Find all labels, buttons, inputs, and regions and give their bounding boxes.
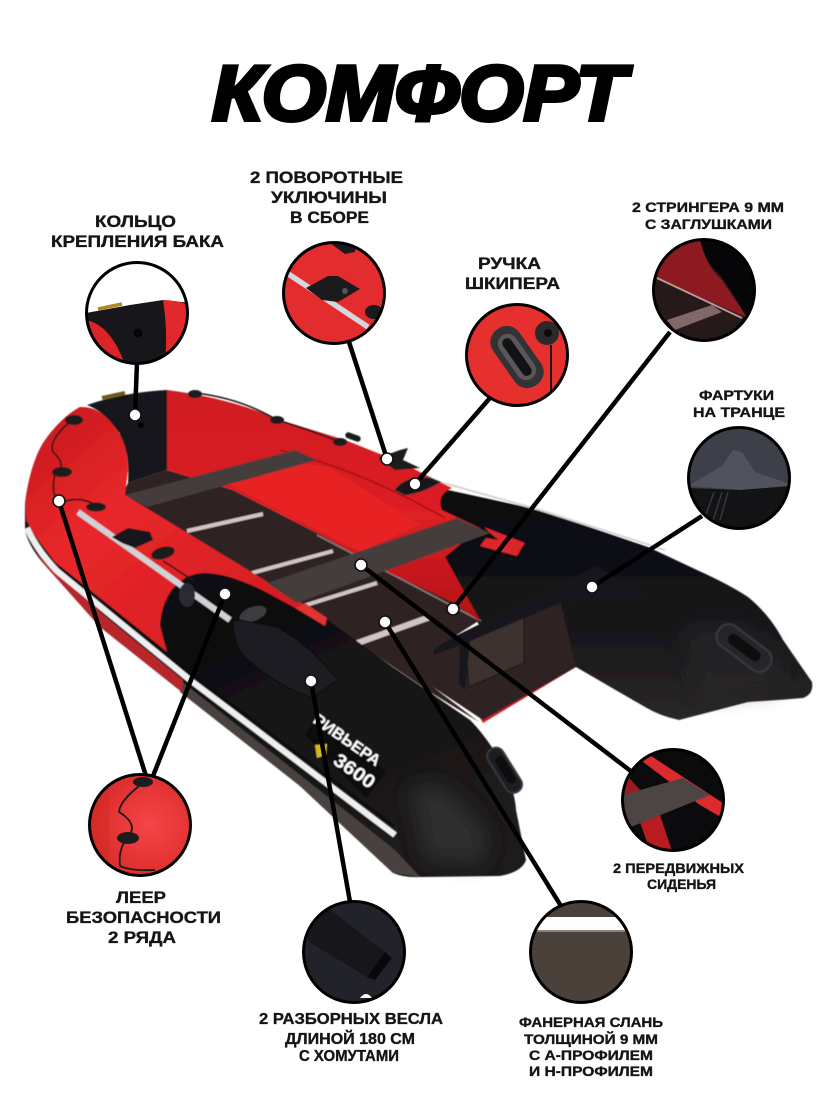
seat 2 — [267, 518, 490, 603]
detail circle: oarlocks — [283, 242, 385, 344]
label: sliding seats: СИДЕНЬЯ — [647, 876, 716, 892]
label: plywood floor: ТОЛЩИНОЙ 9 ММ — [524, 1030, 658, 1047]
near tube silhouette — [25, 407, 526, 877]
label: stringers: С ЗАГЛУШКАМИ — [645, 216, 772, 232]
label: transom aprons — [693, 387, 785, 420]
illustration: inflatable boat — [25, 390, 812, 877]
label: oars: С ХОМУТАМИ — [299, 1048, 399, 1065]
far tube inner red wall — [167, 390, 481, 622]
label: sliding seats — [613, 860, 745, 892]
label: safety rope: 2 РЯДА — [108, 929, 176, 947]
label: oars: ДЛИНОЙ 180 СМ — [285, 1030, 415, 1048]
label: oarlocks — [250, 169, 403, 227]
bow black panel — [87, 390, 167, 483]
label: safety rope: БЕЗОПАСНОСТИ — [66, 909, 221, 927]
near tube rear handle — [484, 745, 525, 796]
label: skipper handle: РУЧКА — [478, 255, 541, 273]
label: safety rope — [66, 889, 221, 947]
label: plywood floor — [519, 1014, 663, 1079]
label: stringers: 2 СТРИНГЕРА 9 ММ — [632, 199, 784, 215]
near oar blade — [233, 620, 338, 698]
label: transom aprons: НА ТРАНЦЕ — [693, 404, 785, 420]
thwart red rail — [480, 538, 524, 556]
label: oarlocks: 2 ПОВОРОТНЫЕ — [250, 169, 403, 187]
detail circle: sliding seats — [622, 749, 726, 851]
near black tube fittings — [179, 583, 269, 625]
floor strips — [187, 514, 481, 645]
label: transom aprons: ФАРТУКИ — [699, 387, 774, 403]
label: oars: 2 РАЗБОРНЫХ ВЕСЛА — [259, 1011, 443, 1028]
label: plywood floor: С А-ПРОФИЛЕМ — [529, 1047, 653, 1063]
transom apron — [433, 566, 650, 690]
label: stringers — [632, 199, 784, 232]
label: skipper handle: ШКИПЕРА — [465, 275, 560, 293]
seat 2 rail — [484, 527, 525, 555]
badge logo — [315, 744, 327, 758]
near tube lower grey band — [180, 680, 420, 877]
model name: РИВЬЕРА — [310, 711, 384, 770]
floor — [122, 470, 480, 722]
callout lines — [59, 332, 702, 906]
floor red underside — [478, 660, 576, 723]
skipper handle — [395, 478, 440, 495]
bow fuel ring — [138, 422, 144, 428]
callout dots — [53, 409, 598, 687]
far tube inner red shading — [225, 464, 420, 552]
label: fuel tank ring: КРЕПЛЕНИЯ БАКА — [51, 233, 224, 251]
near red inner strip — [295, 603, 327, 626]
near bow red section — [25, 407, 325, 652]
rope fittings — [52, 390, 362, 562]
detail circle: plywood floor — [530, 901, 632, 1003]
near tube lower red band — [26, 530, 183, 692]
far tube highlight — [680, 619, 780, 700]
far tube rear handle — [712, 620, 776, 676]
label: sliding seats: 2 ПЕРЕДВИЖНЫХ — [613, 860, 745, 876]
detail circle: fuel tank ring — [86, 262, 190, 365]
label: oarlocks: В СБОРЕ — [290, 209, 369, 227]
rope — [52, 393, 340, 582]
far tube seam — [562, 612, 572, 665]
label: safety rope: ЛЕЕР — [116, 889, 166, 907]
near oarlock — [112, 528, 153, 548]
seat 1 — [125, 450, 317, 507]
near tube tip highlight — [410, 786, 490, 865]
label: fuel tank ring — [51, 213, 224, 251]
title: КОМФОРТ — [212, 49, 633, 137]
detail circle: stringers — [653, 239, 755, 341]
label: plywood floor: ФАНЕРНАЯ СЛАНЬ — [519, 1014, 663, 1030]
near oar shaft — [78, 512, 230, 620]
far oarlock — [378, 448, 420, 470]
bow yellow handle — [102, 393, 125, 398]
label: oars — [259, 1011, 443, 1065]
rubbing strake white stripe — [27, 528, 395, 835]
far tube top crease — [280, 450, 445, 518]
label: fuel tank ring: КОЛЬЦО — [95, 213, 176, 231]
model badge — [305, 716, 386, 798]
label: skipper handle — [465, 255, 560, 293]
detail circle: skipper handle — [466, 304, 568, 406]
label: plywood floor: И Н-ПРОФИЛЕМ — [529, 1063, 653, 1079]
label: oarlocks: УКЛЮЧИНЫ — [271, 189, 387, 207]
detail circle: safety rope — [89, 774, 191, 876]
far tube, black stern section — [430, 490, 812, 720]
transom — [433, 600, 576, 720]
model number: 3600 — [329, 750, 379, 793]
far rail white stripe — [440, 482, 665, 550]
detail circle: transom aprons — [688, 427, 790, 529]
transom plate — [465, 615, 524, 687]
detail circle: oars — [303, 901, 405, 1003]
rubbing strake black line — [26, 522, 394, 826]
